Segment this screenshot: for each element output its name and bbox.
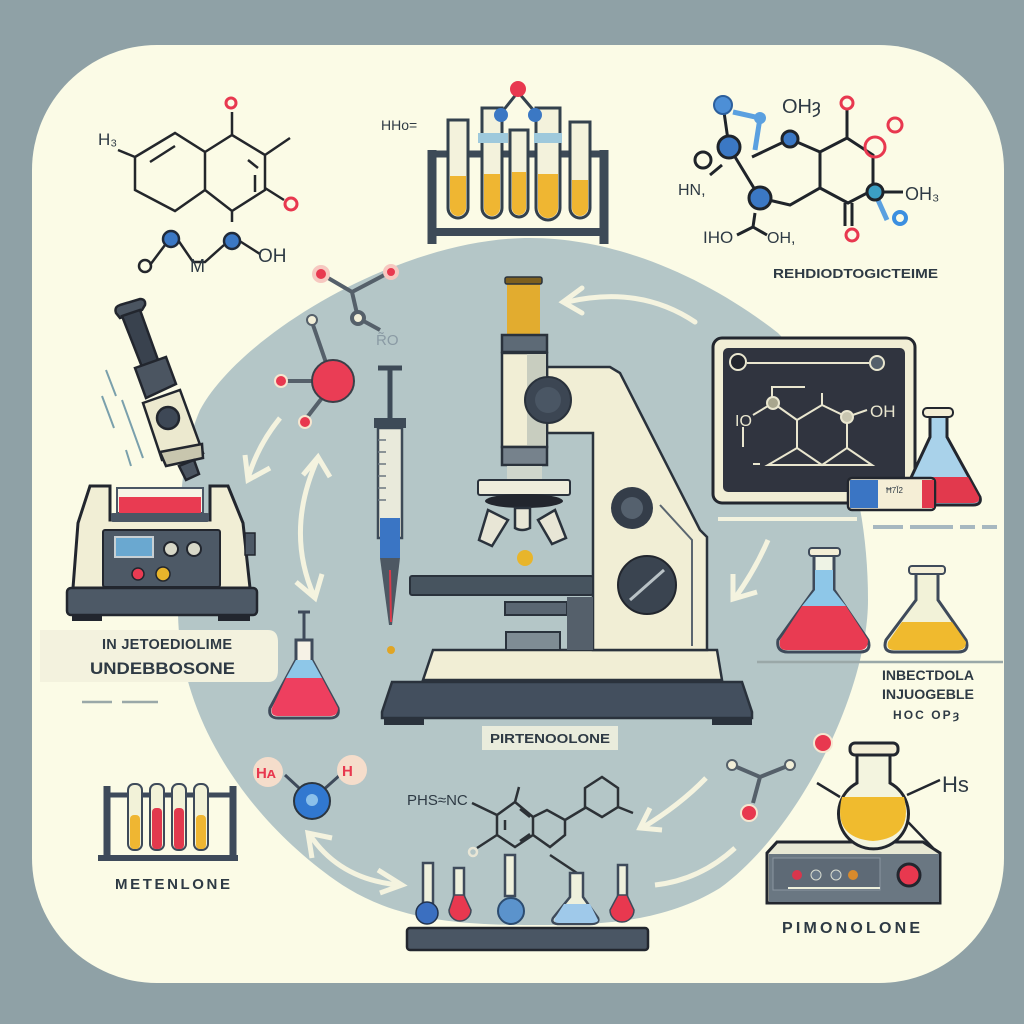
- vial: Ħ7Ǐ2: [886, 486, 903, 495]
- microscope base: [382, 682, 752, 718]
- label: right flasks: INJUOGEBLE: [882, 686, 974, 702]
- molecule: top left: [98, 98, 297, 276]
- objectives: [479, 510, 508, 546]
- label: microscope: [482, 726, 618, 750]
- microscope stage: [410, 576, 593, 595]
- molecule: top left: OH: [258, 246, 286, 267]
- label: left: [40, 630, 278, 702]
- small molecule: upper centre: [314, 266, 398, 349]
- monitor: IO: [735, 413, 752, 430]
- molecule: top right: OH₃: [905, 184, 939, 204]
- syringe: [374, 368, 406, 654]
- molecule: top right: IHO: [703, 228, 733, 247]
- flask: yellow: [885, 566, 967, 652]
- molecule: bottom centre: [407, 777, 633, 873]
- test tube rack: top centre: HHo=: [381, 117, 417, 133]
- dividers: [718, 517, 857, 521]
- molecule: top left: M: [190, 256, 205, 276]
- label: microscope: PIRTENOOLONE: [490, 732, 610, 746]
- handheld scope: [102, 299, 203, 480]
- molecule: top right: [678, 96, 939, 247]
- vial: [848, 478, 935, 510]
- round flask on heater: [767, 743, 969, 903]
- molecule: top left: H₃: [98, 130, 117, 149]
- molecule: blue atom: Hᴀ: [256, 765, 276, 782]
- arrow: top of circle: [563, 288, 695, 322]
- small molecule: upper centre: R̃O: [376, 332, 398, 349]
- test tube rack: bottom left: [98, 784, 238, 858]
- arrow: left top: [245, 418, 280, 480]
- test tube rack: top centre: [381, 81, 606, 244]
- molecule: blue atom: [253, 755, 367, 819]
- microscope tube: [507, 284, 540, 334]
- molecule: top right: OH,: [767, 230, 795, 247]
- label: right flasks: INBECTDOLA: [882, 667, 974, 683]
- molecule: top right: OHȝ: [782, 96, 821, 118]
- hot plate device: [67, 486, 257, 621]
- arrow: right: [733, 540, 768, 599]
- monitor: [713, 338, 915, 503]
- test tube set: bottom: [407, 855, 648, 950]
- label: bottom left: METENLONE: [115, 876, 230, 893]
- microscope arm: [547, 367, 707, 650]
- label: right flasks: HOC OPȝ: [893, 708, 959, 722]
- molecule: bottom centre: PHS≈NC: [407, 792, 468, 809]
- arrow: left double: [296, 457, 330, 598]
- molecule: bottom right small: [727, 734, 832, 821]
- molecule: top right: HN,: [678, 182, 706, 199]
- round flask on heater: Hs: [942, 772, 969, 797]
- flask: red: [778, 548, 869, 652]
- arrow: bottom left: [308, 833, 402, 893]
- molecule: blue atom: H: [342, 763, 353, 780]
- molecule: red atom: [275, 315, 354, 428]
- arrow: bottom right: [640, 778, 735, 885]
- label: top right: REHDIODTOGICTEIME: [773, 266, 938, 281]
- label: left: IN JETOEDIOLIME: [102, 637, 232, 653]
- microscope: [382, 277, 752, 725]
- label: right flasks: [882, 667, 974, 722]
- monitor: OH: [870, 402, 896, 421]
- label: left: UNDEBBOSONE: [90, 660, 235, 678]
- label: bottom right: PIMONOLONE: [782, 920, 920, 937]
- flask: monitor side: [901, 408, 980, 505]
- panel: central circle: [178, 238, 868, 925]
- flask: left small: [270, 612, 338, 718]
